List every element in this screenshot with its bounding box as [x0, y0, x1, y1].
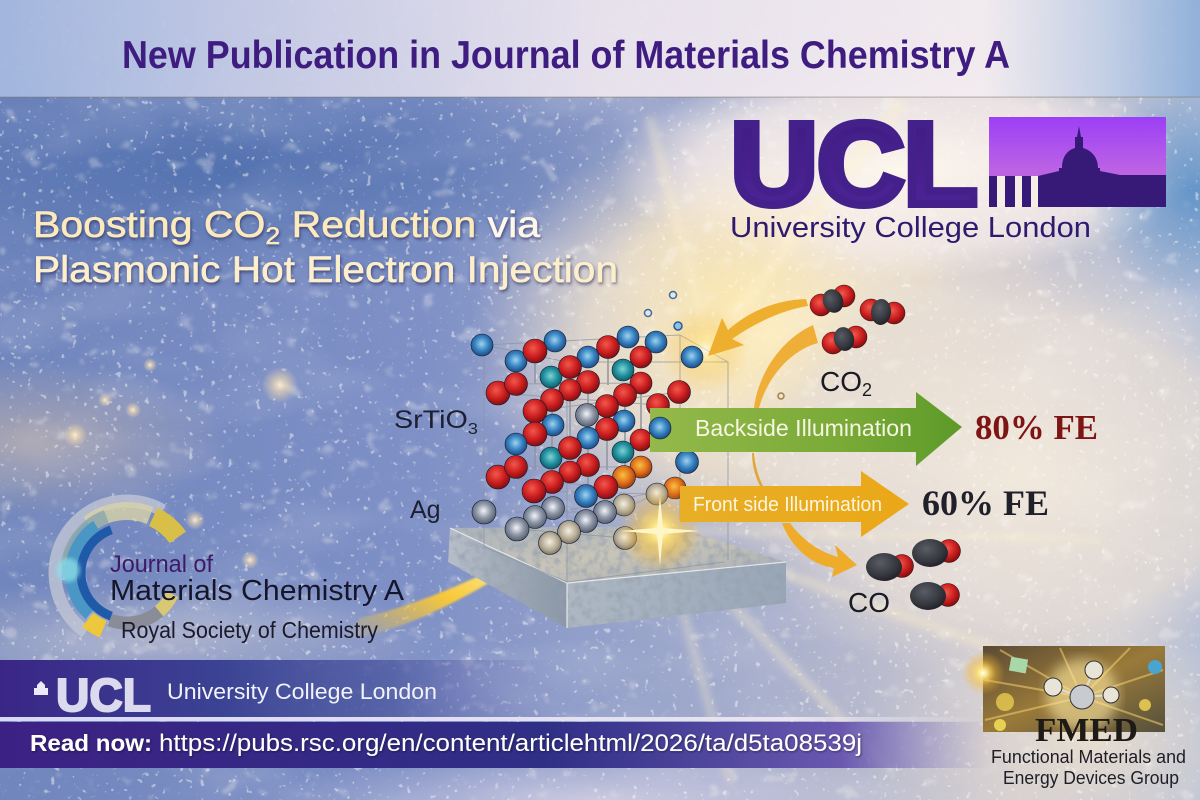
light rays from the crystal [650, 105, 1100, 780]
front side label: Front side Illumination [693, 494, 882, 516]
FMED description: Functional Materials and [991, 747, 1186, 767]
label: SrTiO3: SrTiO [394, 406, 458, 434]
orange arrow: front side illumination [680, 471, 909, 537]
publisher: Royal Society of Chemistry [121, 617, 378, 643]
crystal wireframe and bonds [484, 335, 728, 582]
footer name: University College London [167, 679, 437, 704]
perovskite and silver atoms [471, 326, 703, 554]
UCL dome panel [989, 117, 1166, 207]
label: Ag: Ag [410, 496, 441, 524]
headline: via [486, 204, 534, 245]
CO2 molecules [810, 285, 905, 354]
metal slab substrate [448, 526, 786, 628]
label: SrTiO3: 3 [468, 421, 478, 438]
FMED picture [961, 646, 1165, 732]
UCL main logo [730, 99, 1166, 244]
glow near CO2 entry [660, 305, 750, 395]
80% FE result: 80% FE [975, 408, 1098, 447]
top title band [0, 0, 1200, 98]
gold light beam to slab [345, 558, 522, 640]
FMED name: FMED [1035, 712, 1138, 749]
headline: Boosting CO [33, 204, 265, 245]
curved conversion arrow middle part [752, 453, 763, 486]
FMED logo: Energy Devices Group [1003, 768, 1179, 788]
60% FE result: 60% FE [922, 483, 1049, 523]
backside atom over arrow [649, 417, 671, 439]
UCL wordmark: UCL [731, 99, 977, 229]
curved conversion arrow lower part [782, 523, 857, 577]
CO label: CO [848, 587, 890, 618]
small icon [34, 681, 48, 695]
molecule icon [1044, 661, 1119, 709]
curved conversion arrow upper part [754, 325, 818, 408]
headline [33, 204, 618, 290]
read now label: Read now: [30, 730, 152, 756]
headline: Plasmonic Hot Electron Injection [33, 249, 618, 290]
bubbles above crystal [644, 292, 784, 399]
headline: 2 [265, 223, 280, 250]
CO2 label: CO [820, 366, 862, 397]
spark on crystal [618, 489, 702, 573]
url: https://pubs.rsc.org/en/content/articlehtml/2026/ta/d5ta08539j [159, 730, 862, 757]
green arrow: backside illumination [649, 392, 962, 466]
slab body [450, 526, 786, 583]
footer bar: read now link [0, 722, 990, 768]
journal name: Journal of [110, 551, 213, 578]
UCL full name: University College London [730, 212, 1091, 244]
CO2 label: 2 [862, 380, 872, 400]
backside label: Backside Illumination [695, 415, 912, 441]
journal logo: Materials Chemistry A [110, 575, 405, 607]
journal ring [27, 473, 227, 673]
curved CO2 inflow arrow [708, 299, 808, 356]
footer bar: UCL [0, 660, 990, 721]
journal logo [27, 473, 405, 673]
title: New Publication in Journal of Materials Chemistry A [122, 34, 1010, 77]
UCL footer wordmark: UCL [56, 669, 151, 721]
CO molecules [866, 539, 960, 610]
headline: Reduction [280, 204, 476, 245]
FMED logo [961, 646, 1186, 788]
